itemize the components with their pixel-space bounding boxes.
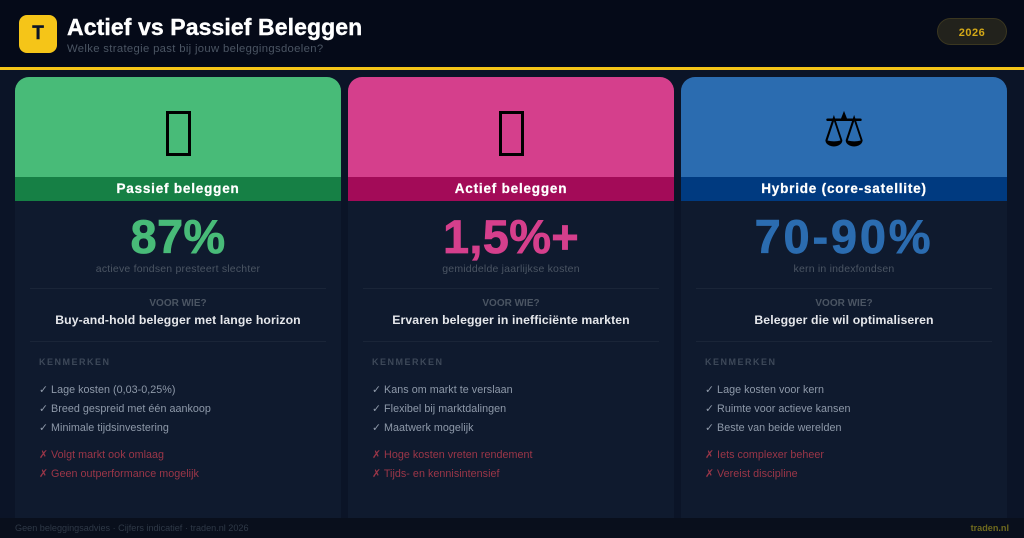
pros list: ✓ Ruimte voor actieve kansen [705,403,850,415]
number caption: gemiddelde jaarlijkse kosten [442,263,580,275]
kenmerken heading: KENMERKEN [39,357,111,367]
band label [348,177,674,201]
card header: blue [681,77,1007,177]
brand: traden.nl [971,523,1009,533]
band label [681,177,1007,201]
band label [15,177,341,201]
pros list [39,384,211,434]
title: Actief vs Passief Beleggen [67,14,362,40]
voor wie label: VOOR WIE? [482,298,540,309]
card header: green [15,77,341,177]
cons list: ✗ Geen outperformance mogelijk [39,468,199,480]
voor wie label: VOOR WIE? [815,298,873,309]
cons list [705,449,824,480]
voor wie text: Belegger die wil optimaliseren [754,313,934,327]
icon: balance scale: ⚖ [822,102,866,158]
header bar [0,0,1024,70]
subtitle: Welke strategie past bij jouw beleggingsdoelen? [67,43,323,55]
kenmerken heading: KENMERKEN [705,357,777,367]
pros list: ✓ Lage kosten voor kern [705,384,824,396]
panel: hybride [681,77,1007,518]
number caption: kern in indexfondsen [794,263,894,275]
pros list: ✓ Kans om markt te verslaan [372,384,513,396]
cons list: ✗ Tijds- en kennisintensief [372,468,500,480]
pros list: ✓ Maatwerk mogelijk [372,422,474,434]
icon: missing glyph box [166,111,191,156]
footer bar [0,518,1024,538]
year badge: 2026 [959,27,985,39]
cons list: ✗ Volgt markt ook omlaag [39,449,164,461]
voor wie text: Ervaren belegger in inefficiënte markten [392,313,630,327]
big number: 1,5%+ [443,210,579,263]
pros list: ✓ Flexibel bij marktdalingen [372,403,506,415]
logo: T badge [19,15,57,53]
number caption: actieve fondsen presteert slechter [96,263,260,275]
band label: Passief beleggen [116,181,240,196]
big number: 87% [130,210,225,263]
pros list [372,384,513,434]
cons list: ✗ Iets complexer beheer [705,449,824,461]
cons list [372,449,532,480]
pros list [705,384,850,434]
voor wie text: Buy-and-hold belegger met lange horizon [55,313,301,327]
card header: pink [348,77,674,177]
voor wie label: VOOR WIE? [149,298,207,309]
panel: actief beleggen [348,77,674,518]
cons list: ✗ Vereist discipline [705,468,798,480]
year badge [937,18,1007,45]
cons list [39,449,199,480]
pros list: ✓ Breed gespreid met één aankoop [39,403,211,415]
cons list: ✗ Hoge kosten vreten rendement [372,449,532,461]
big number: 70-90% [755,210,933,263]
kenmerken heading: KENMERKEN [372,357,444,367]
band label: Hybride (core-satellite) [761,181,927,196]
icon: missing glyph box [499,111,524,156]
panel: passief beleggen [15,77,341,518]
band label: Actief beleggen [455,181,567,196]
logo: T badge: T [32,23,44,44]
pros list: ✓ Minimale tijdsinvestering [39,422,169,434]
pros list: ✓ Lage kosten (0,03-0,25%) [39,384,175,396]
pros list: ✓ Beste van beide werelden [705,422,841,434]
disclaimer: Geen beleggingsadvies · Cijfers indicatief · traden.nl 2026 [15,523,249,533]
